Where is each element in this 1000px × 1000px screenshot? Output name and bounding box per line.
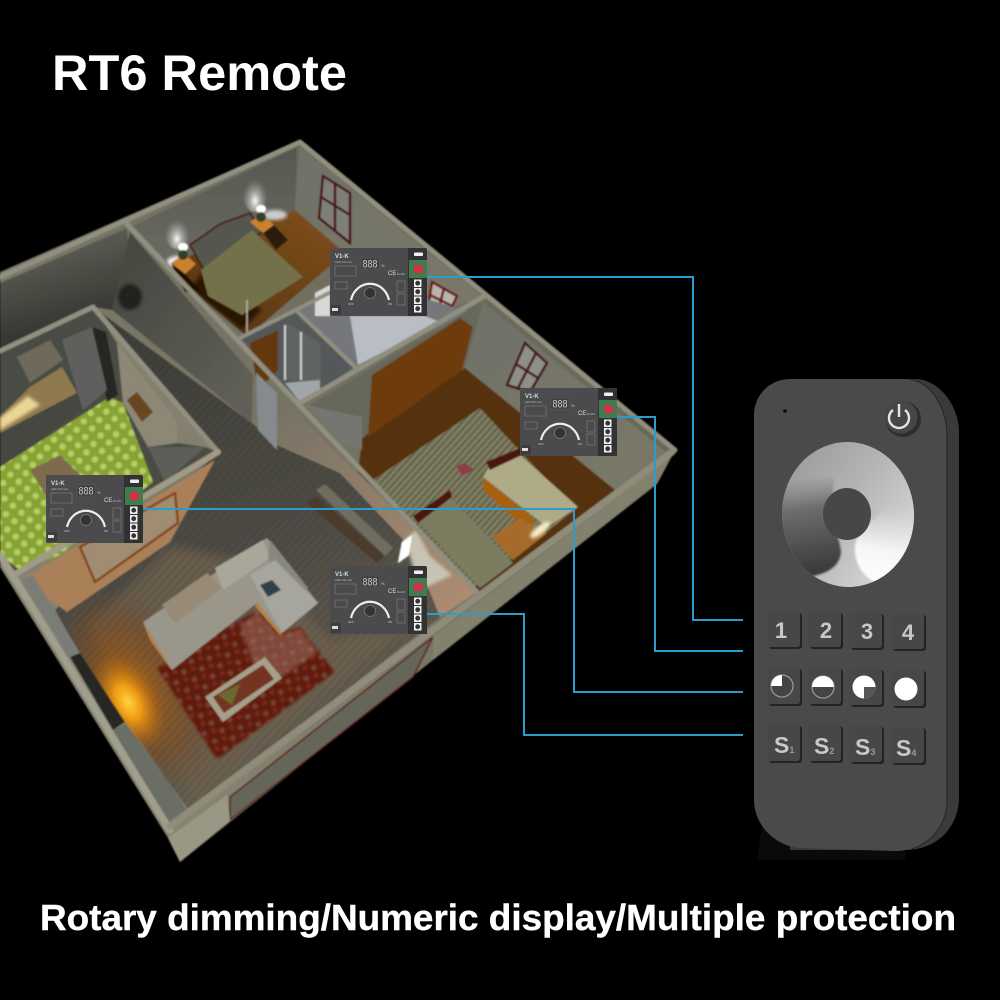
plant [118, 284, 142, 310]
number buttons: 2 [820, 618, 832, 643]
floor [55, 312, 440, 812]
wall cabinet [17, 340, 63, 383]
bedroom three right wall [465, 302, 666, 492]
grey door [148, 447, 205, 482]
dimmer module, bedroom three: V1-K [525, 394, 539, 400]
nightstand [492, 518, 547, 560]
striped rug [373, 408, 575, 590]
line to channel 1 [427, 277, 743, 620]
bedroom one side wall [295, 147, 483, 312]
dimmer module, kitchen: LED Dimmer [51, 487, 68, 491]
closet interior [240, 312, 355, 403]
dimmer module, living room: % [381, 581, 385, 586]
shelf [127, 392, 153, 422]
remote side edge [790, 379, 959, 850]
shower curtain [350, 316, 440, 365]
connection lines [143, 277, 743, 735]
number buttons: 4 [902, 620, 915, 645]
lower wall with red trim [230, 637, 433, 820]
wall lamp glows [164, 168, 287, 268]
bed [201, 230, 303, 315]
second window [428, 282, 457, 317]
line to channel 4 [427, 614, 743, 735]
glass panels [287, 323, 320, 383]
bathroom wall [298, 285, 470, 367]
dimmer module, kitchen: ON [104, 529, 108, 533]
scene buttons: S4 [896, 735, 916, 761]
nightstands and lamps [171, 205, 288, 292]
dimmer module, bedroom one [330, 248, 427, 316]
dimmer module, bedroom one: CE [388, 271, 396, 277]
dimmer module, bedroom three: LED Dimmer [525, 400, 542, 404]
line to channel 2 [617, 417, 743, 651]
dimmer module, kitchen: RoHS [113, 499, 121, 503]
headboard [190, 213, 262, 272]
dining table [30, 455, 95, 510]
bedroom three floor [358, 368, 615, 592]
shadow under bed [190, 268, 262, 330]
dimmer module, living room: V1-K [335, 572, 349, 578]
brightness buttons [767, 668, 926, 708]
dimmer module, bedroom one: V1-K [335, 254, 349, 260]
fridge [62, 327, 107, 410]
scene buttons [767, 725, 926, 765]
dimmer module, kitchen [46, 475, 143, 543]
long wall niche [307, 496, 385, 563]
dimmer module, bedroom three: OFF [538, 442, 544, 446]
bottom feature caption: Rotary dimming/Numeric display/Multiple protection [40, 897, 956, 938]
wood floor glow [94, 658, 162, 748]
left curtain lower [113, 722, 187, 825]
kitchen back wall [0, 312, 117, 470]
dimmer module, kitchen: CE [104, 498, 112, 504]
green floor [0, 397, 153, 570]
full brightness icon [894, 678, 918, 700]
outer right wall face [433, 456, 672, 660]
dimmer module, bedroom one: LED Dimmer [335, 260, 352, 264]
lighter lower floor [90, 545, 420, 800]
right bed [483, 448, 578, 530]
kitchen outer wall [22, 460, 215, 612]
touch wheel [782, 442, 914, 587]
bedroom three window [507, 343, 547, 392]
power button [884, 400, 921, 437]
remote shadow [757, 825, 905, 860]
wooden door [250, 330, 278, 390]
dimmer module, living room: 888 [362, 576, 378, 588]
left bed [413, 490, 513, 588]
dimmer module, bedroom one: RoHS [397, 272, 405, 276]
dimmer module, living room: LED Dimmer [335, 578, 352, 582]
wall rims [0, 142, 675, 830]
remote front face [754, 379, 947, 851]
hallway back wall [0, 228, 133, 352]
dimmer module, bedroom one: 888 [362, 258, 378, 270]
scene buttons: S1 [774, 732, 794, 758]
fridge shadow [92, 327, 118, 402]
bedroom one [133, 147, 483, 337]
number buttons: 1 [775, 618, 787, 643]
outer corner face [168, 795, 230, 862]
remote seam [908, 379, 947, 849]
light floor [285, 380, 320, 402]
number buttons [767, 612, 926, 651]
quarter brightness icon [771, 675, 793, 697]
bed pole [246, 300, 248, 332]
dimmer module, bedroom three: 888 [552, 398, 568, 410]
nightstand lamp light [528, 519, 552, 541]
wardrobe [368, 318, 473, 437]
bedroom one back wall [133, 147, 297, 268]
scene buttons: S2 [814, 733, 834, 759]
centre hole [823, 488, 871, 540]
left curtain upper [22, 575, 80, 657]
title: RT6 Remote [52, 45, 347, 101]
dimmer module, bedroom three: ON [578, 442, 582, 446]
counter highlight [0, 396, 40, 430]
dark left lobe [782, 478, 842, 577]
hall doorway [256, 373, 277, 450]
warm light pool [68, 597, 212, 779]
dimmer module, living room [330, 566, 427, 634]
dimmer module, bedroom one: % [381, 263, 385, 268]
dimmer module, kitchen: V1-K [51, 481, 65, 487]
dimmer module, bedroom one: OFF [348, 302, 354, 306]
dimmer module, bedroom three: RoHS [587, 412, 595, 416]
dimmer module, kitchen: % [97, 490, 101, 495]
RT6 remote control [754, 379, 959, 860]
wall lamp flare [398, 530, 452, 590]
indicator dot [783, 409, 787, 413]
door leaf [306, 405, 362, 450]
bedroom three [306, 302, 666, 592]
scene buttons: S3 [855, 734, 875, 760]
building outer shell [0, 140, 675, 862]
pale rug pattern [240, 612, 318, 690]
three-quarter brightness icon [852, 676, 876, 698]
lower cabinets [0, 393, 83, 465]
dimmer module, kitchen: OFF [64, 529, 70, 533]
kitchen beige wall [97, 312, 218, 452]
counter [0, 367, 77, 433]
hallway and living room floor [0, 232, 672, 862]
sofa [143, 538, 318, 670]
dimmer module, bedroom one: ON [388, 302, 392, 306]
bedroom three left wall [310, 302, 483, 440]
dimmer module, living room: CE [388, 589, 396, 595]
dimmer module, living room: RoHS [397, 590, 405, 594]
rug [157, 610, 335, 760]
kitchen partition wall [117, 343, 178, 447]
floor plan illustration [0, 140, 675, 862]
dimmer module, kitchen: 888 [78, 486, 94, 498]
dimmer module, bedroom three: CE [578, 411, 586, 417]
bright right lobe [854, 514, 914, 582]
kitchen base [0, 307, 218, 573]
line to channel 3 [143, 509, 743, 692]
hallway right wall [112, 232, 253, 423]
dimmer module, bedroom three: % [571, 403, 575, 408]
half brightness icon [812, 676, 834, 698]
kitchen [0, 312, 218, 570]
bathroom [240, 285, 470, 403]
left window dark [70, 653, 125, 730]
coffee table [205, 657, 282, 722]
bedroom one window [319, 176, 350, 243]
slippers [456, 463, 474, 476]
dimmer module, living room: OFF [348, 620, 354, 624]
dimmer module, bedroom three [520, 388, 617, 456]
bedroom one floor [167, 210, 345, 337]
white panel [315, 285, 330, 316]
number buttons: 3 [861, 619, 873, 644]
wall facing living room [256, 372, 477, 617]
dimmer module, living room: ON [388, 620, 392, 624]
wall painting [80, 493, 178, 582]
